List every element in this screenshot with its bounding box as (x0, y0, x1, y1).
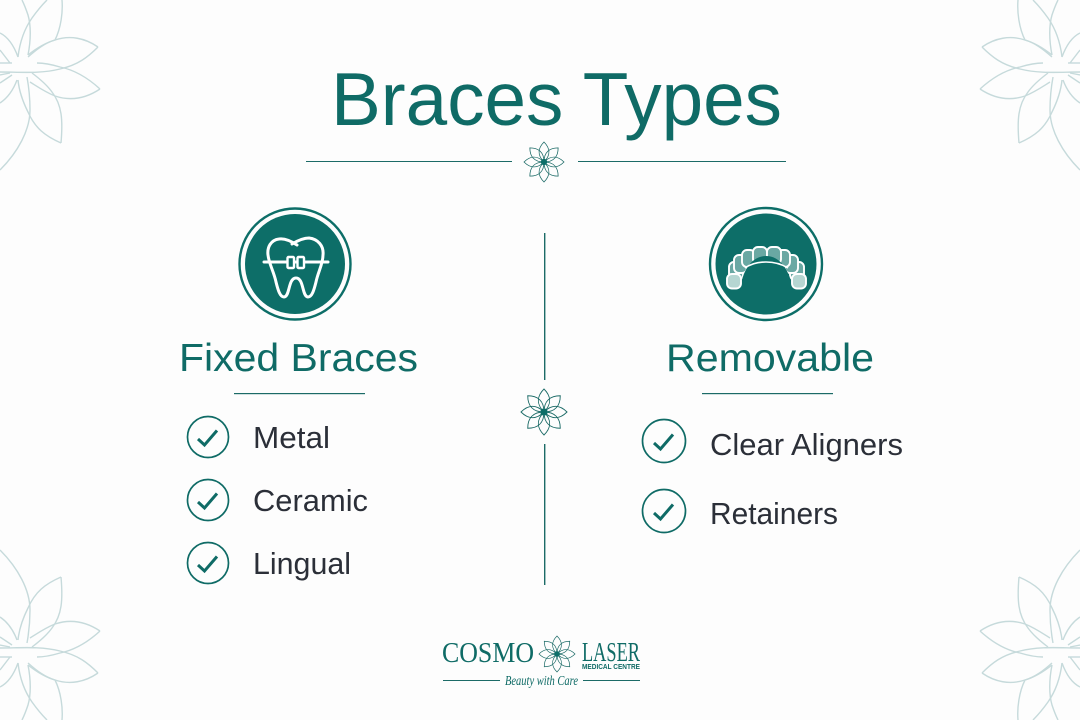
list item: retainers (642, 490, 838, 532)
heading: fixed braces: Fixed Braces (179, 337, 418, 380)
list item: lingual (188, 542, 351, 584)
heading: removable: Removable (666, 337, 874, 380)
logo: Cosmo Laser Medical Centre: LASER (582, 637, 640, 667)
list item: ceramic: Ceramic (253, 483, 368, 518)
corner flower: top right (980, 0, 1080, 170)
list item: metal: Metal (253, 420, 330, 455)
corner flower: top left (0, 0, 100, 170)
panel: removable (642, 208, 903, 532)
corner flower: bottom left (0, 550, 100, 720)
list item: clear aligners: Clear Aligners (710, 427, 903, 462)
list item: metal (188, 416, 330, 458)
corner flower: bottom right (980, 550, 1080, 720)
logo: Cosmo Laser Medical Centre: COSMO (442, 638, 534, 669)
list item: retainers: Retainers (710, 496, 838, 531)
list item: ceramic (188, 480, 368, 520)
title divider with flower (306, 142, 786, 182)
panel: fixed braces (179, 208, 418, 584)
centre divider with flower (521, 233, 567, 585)
logo: Cosmo Laser Medical Centre: MEDICAL CENTRE (582, 664, 640, 671)
logo: Cosmo Laser Medical Centre (442, 636, 640, 689)
list item: clear aligners (642, 420, 903, 462)
icon: clear aligner (710, 208, 822, 320)
icon: tooth with braces (240, 208, 350, 320)
list item: lingual: Lingual (253, 546, 351, 581)
title: Braces Types (331, 57, 782, 141)
logo: Cosmo Laser Medical Centre: Beauty with Care (505, 674, 578, 689)
